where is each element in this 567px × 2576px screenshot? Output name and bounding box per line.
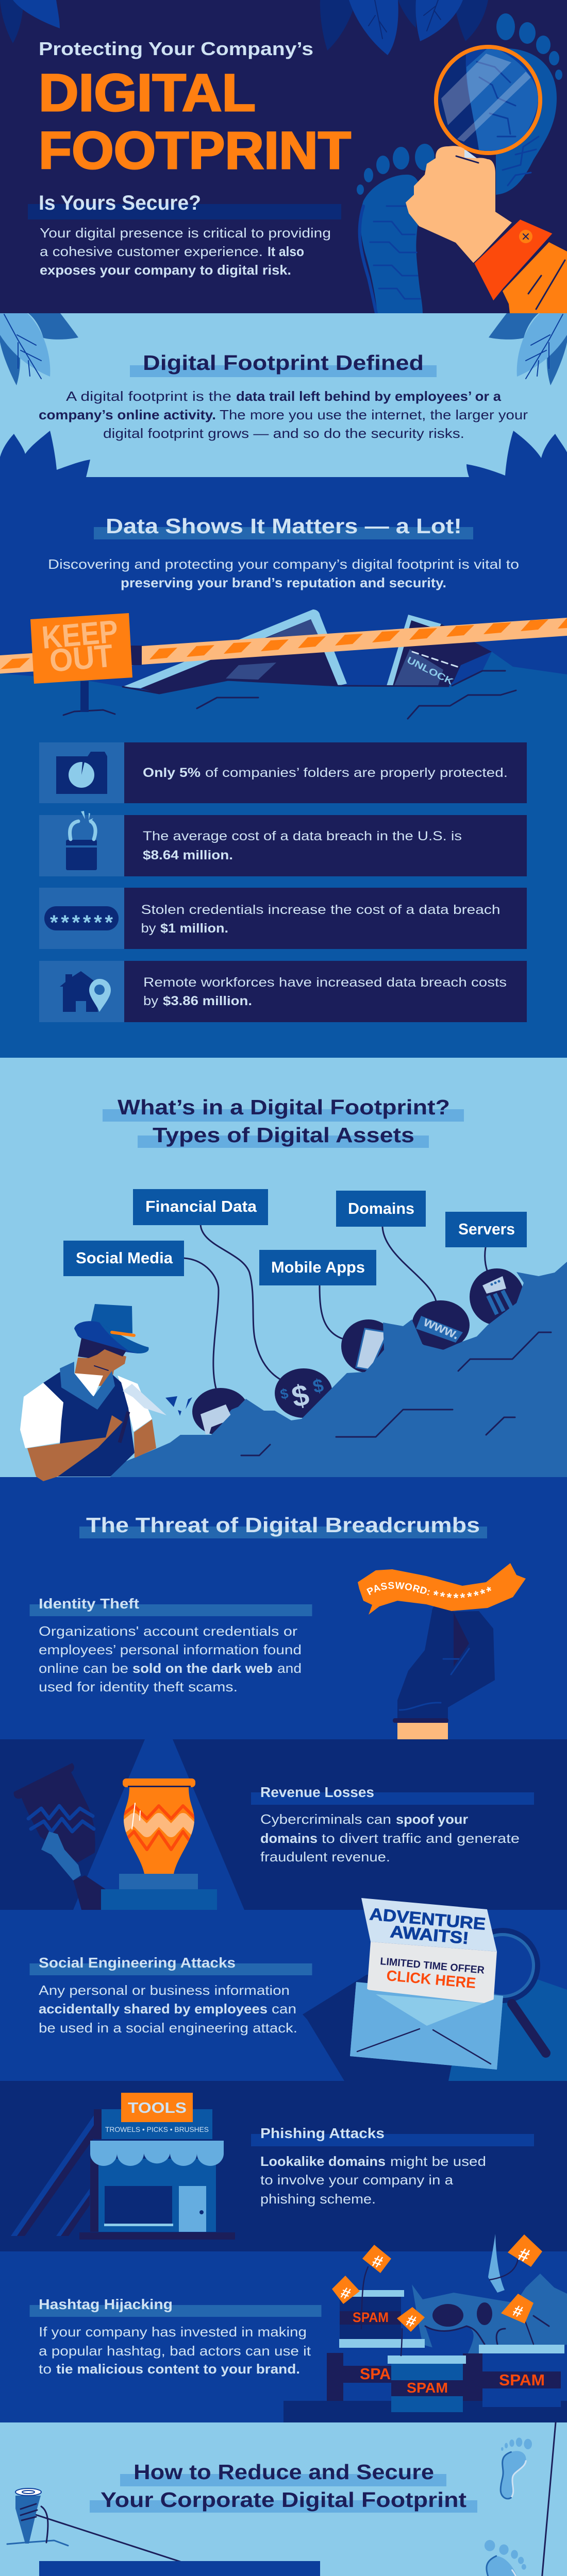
illustration: stolen dark vase and hand — [14, 1763, 106, 1910]
stat text — [141, 903, 501, 936]
stat text: $3.86 million. — [163, 994, 252, 1008]
illustration: keep out tape — [0, 617, 567, 674]
icon: tool shop: TOOLS — [128, 2100, 187, 2116]
icon: password ribbon: PASSWORD: — [366, 1582, 430, 1595]
icon: tool shop: TROWELS • PICKS • BRUSHES — [105, 2125, 209, 2133]
icon: password ribbon — [358, 1563, 526, 1615]
heading: Protecting Your Company's: Protecting Your Company’s — [39, 38, 313, 59]
panel: hero — [0, 0, 567, 313]
text block: phishing: Lookalike domains — [260, 2154, 386, 2169]
label: Mobile Apps: Mobile Apps — [271, 1258, 365, 1276]
text block: data intro: preserving your brand’s reputation and security. — [121, 575, 446, 590]
icon: folder with pie — [56, 752, 107, 794]
arms — [27, 1415, 156, 1481]
illustration: mountain — [110, 1262, 567, 1477]
text block: data intro: Discovering and protecting your company’s digital footprint is vital to — [48, 556, 519, 572]
panel: revenue losses — [0, 1739, 567, 1910]
label: Servers — [445, 1212, 527, 1247]
subheading: Revenue Losses: Revenue Losses — [260, 1784, 374, 1800]
icon: broken lock — [66, 811, 97, 870]
text block: identity theft: employees’ personal information found — [39, 1642, 302, 1657]
icon: keep out sign: OUT — [48, 638, 114, 679]
text block: identity theft: online can be — [39, 1660, 128, 1676]
subheading: Identity Theft: Identity Theft — [39, 1596, 139, 1612]
text block: hero intro: Your digital presence is critical to providing — [40, 225, 331, 241]
icon: phishing flyer in envelope: LIMITED TIME OFFER — [380, 1956, 485, 1976]
icon: password ribbon: ********* — [433, 1587, 492, 1598]
hat — [74, 1304, 148, 1353]
panel: types of digital assets — [0, 1058, 567, 1477]
stat text: by — [141, 921, 156, 936]
text block: revenue losses: domains — [260, 1831, 318, 1846]
icon: phishing flyer in envelope: AWAITS! — [389, 1922, 470, 1947]
heading: Types of Digital Assets: Types of Digital Assets — [153, 1123, 414, 1147]
icon: hand — [406, 146, 512, 263]
subheading: Phishing Attacks: Phishing Attacks — [260, 2125, 385, 2141]
icon: www bar: www. — [421, 1314, 462, 1343]
text block: phishing: to involve your company in a — [260, 2172, 454, 2188]
subheading: Identity Theft — [30, 1596, 312, 1616]
text block: definition: data trail left behind by employees’ or a — [236, 388, 502, 404]
icon: magnifying glass behind envelope — [468, 1930, 546, 2053]
text block: social engineering: be used in a social engineering attack. — [39, 2020, 297, 2036]
decorative ropes — [16, 2422, 556, 2576]
heading: How to Reduce and Secure: How to Reduce and Secure — [134, 2460, 434, 2484]
stat card: breach cost — [39, 811, 527, 876]
text block: social engineering: accidentally shared by employees — [39, 2001, 268, 2016]
subheading: Is Yours Secure?: Is Yours Secure? — [39, 192, 201, 214]
panel: hashtag hijacking — [0, 2234, 567, 2422]
stat text — [143, 975, 507, 1008]
subheading: Is Yours Secure? — [28, 192, 341, 219]
icon: keep out sign — [30, 613, 142, 712]
icon: top-left leaves — [0, 313, 78, 385]
text block: phishing: might be used — [390, 2154, 486, 2169]
subheading: Hashtag Hijacking: Hashtag Hijacking — [39, 2296, 173, 2312]
panel: social engineering attacks — [0, 1898, 567, 2081]
panel: the threat of digital breadcrumbs — [30, 1513, 526, 1739]
text block: identity theft: sold on the dark web — [132, 1660, 273, 1676]
text block: definition: The more you use the internet, the larger your — [220, 407, 528, 422]
label: Social Media: Social Media — [76, 1249, 173, 1267]
panel: how to reduce and secure — [0, 2422, 567, 2576]
subheading: Phishing Attacks — [251, 2125, 534, 2146]
illustration: hashtag flags: # — [511, 2301, 525, 2321]
illustration: spam podiums: SPA — [360, 2365, 391, 2383]
stat text: The average cost of a data breach in the U.S. is — [143, 829, 462, 843]
icon: upper footprint with circuit traces — [466, 13, 562, 195]
text block: identity theft: used for identity theft scams. — [39, 1679, 238, 1694]
illustration: hashtag flags — [332, 2234, 542, 2355]
shirt and vest — [20, 1362, 152, 1477]
text block: social engineering: can — [272, 2001, 296, 2016]
illustration: spam podiums: SPAM — [499, 2371, 545, 2389]
panel: phishing attacks — [0, 2081, 567, 2251]
ground and stat background — [0, 652, 567, 1058]
text block: phishing: phishing scheme. — [260, 2191, 376, 2207]
icon: phishing flyer in envelope: CLICK HERE — [386, 1968, 477, 1992]
text block: social engineering: Any personal or business information — [39, 1982, 290, 1998]
text block: hero intro — [40, 225, 331, 278]
icon: top-right leaves — [489, 313, 567, 385]
text block: revenue losses: fraudulent revenue. — [260, 1849, 390, 1865]
label: Financial Data — [133, 1189, 268, 1225]
stat text — [143, 829, 462, 862]
subheading: Revenue Losses — [251, 1784, 534, 1805]
hammer — [120, 1384, 192, 1443]
icon: password pill: ****** — [50, 911, 113, 934]
text block: social engineering — [39, 1982, 297, 2036]
text block: definition: company’s online activity. — [39, 407, 216, 422]
stat text: $1 million. — [160, 921, 228, 936]
stat card: stolen credentials — [39, 888, 527, 949]
text block: revenue losses: spoof your — [396, 1811, 468, 1827]
text block: identity theft: and — [277, 1660, 302, 1676]
illustration: ladders — [11, 2115, 94, 2236]
stat card: remote workforces — [39, 961, 527, 1022]
text block: definition: digital footprint grows — and so do the security risks. — [103, 426, 464, 441]
icon: top-left leaves — [0, 0, 60, 43]
icon: dollar signs: $ — [311, 1375, 325, 1397]
text block: hashtag: to — [39, 2361, 52, 2377]
text block: hashtag: If your company has invested in making — [39, 2324, 307, 2340]
icon: tool shop — [79, 2093, 235, 2240]
card: prioritize employee security training — [39, 2561, 320, 2576]
text block: hashtag: tie malicious content to your brand. — [56, 2361, 300, 2377]
icon: bottom foliage silhouette — [0, 431, 567, 479]
stat text: of companies’ folders are properly protected. — [205, 766, 508, 780]
label: Financial Data: Financial Data — [145, 1197, 257, 1215]
illustration: sunken laptop — [123, 609, 347, 693]
stat text: $8.64 million. — [143, 848, 233, 862]
illustration: ground cracks — [63, 671, 516, 719]
text block: revenue losses: to divert traffic and generate — [322, 1831, 520, 1846]
icon: server — [482, 1276, 511, 1314]
illustration: hashtag flags: # — [370, 2251, 386, 2272]
heading: Your Corporate Digital Footprint: Your Corporate Digital Footprint — [101, 2488, 466, 2512]
illustration: orange vase on pedestal — [101, 1778, 217, 1910]
icon: gloved hand — [393, 1603, 495, 1739]
illustration: spam podiums: SPAM — [407, 2380, 448, 2396]
illustration: spam dinosaur skull — [412, 2234, 567, 2357]
panel: data shows it matters — [0, 478, 567, 1058]
text block: definition — [39, 388, 528, 441]
text block: revenue losses — [260, 1811, 520, 1865]
icon: phishing flyer in envelope — [350, 1898, 503, 2070]
title: DIGITAL: DIGITAL — [39, 63, 256, 122]
subheading: Social Engineering Attacks: Social Engineering Attacks — [39, 1955, 236, 1971]
icon: top-center leaves — [320, 0, 488, 55]
text block: hero intro: It also — [268, 244, 304, 259]
heading: What's in a Digital Footprint?: What’s in a Digital Footprint? — [118, 1095, 450, 1119]
illustration: sunken phone with UNLOCK label: UNLOCK — [405, 655, 455, 687]
icon: dollar signs: $ — [289, 1378, 312, 1414]
text block: hashtag: a popular hashtag, bad actors can use it — [39, 2343, 311, 2359]
label: Domains — [336, 1191, 426, 1227]
icon: magnifying glass — [436, 46, 544, 164]
stat text: by — [143, 994, 159, 1008]
icon: dollar signs — [279, 1375, 325, 1414]
illustration: spam podiums — [284, 2290, 567, 2422]
text block: revenue losses: Cybercriminals can — [260, 1811, 391, 1827]
text block: hero intro: exposes your company to digital risk. — [40, 262, 291, 278]
icon: house with pin — [60, 971, 111, 1012]
icon: speech bubbles — [201, 1404, 246, 1434]
stat card: folders — [39, 742, 527, 803]
icon: keep out sign: KEEP — [40, 614, 120, 656]
illustration: hashtag flags: # — [339, 2283, 353, 2303]
illustration: mountain cracks — [241, 1332, 551, 1455]
icon: left stake — [7, 2488, 68, 2546]
label: Domains: Domains — [348, 1199, 414, 1217]
text block: data intro — [48, 556, 519, 590]
illustration: hashtag flags: # — [404, 2311, 419, 2331]
text block: phishing — [260, 2154, 486, 2207]
text block: identity theft: Organizations' account credentials or — [39, 1623, 297, 1639]
heading: The Threat of Digital Breadcrumbs: The Threat of Digital Breadcrumbs — [86, 1513, 480, 1537]
icon: footprints trail — [320, 2437, 532, 2576]
stat text: Remote workforces have increased data breach costs — [143, 975, 507, 990]
subheading: Hashtag Hijacking — [30, 2296, 322, 2317]
icon: shirt cuff and sleeve — [474, 219, 567, 313]
illustration: spam podiums: SPAM — [353, 2310, 389, 2325]
illustration: hashtag flags: # — [515, 2243, 532, 2266]
illustration: background shapes — [303, 1964, 567, 2081]
label: Servers: Servers — [458, 1220, 515, 1238]
illustration: sunken phone with UNLOCK label — [387, 615, 492, 687]
heading: Data Shows It Matters: Data Shows It Matters — a Lot! — [106, 514, 462, 538]
illustration: spotlight — [73, 1739, 244, 1910]
text block: hashtag — [39, 2324, 311, 2377]
icon: lower footprint with circuit traces — [357, 144, 435, 313]
panel: digital footprint defined — [0, 313, 567, 479]
stat text: Stolen credentials increase the cost of a data breach — [141, 903, 501, 917]
icon: phone — [356, 1329, 388, 1370]
label: Social Media — [63, 1241, 184, 1276]
illustration: rocks — [192, 1268, 524, 1435]
head — [72, 1338, 126, 1386]
icon: phishing flyer in envelope: ADVENTURE — [369, 1904, 487, 1934]
text block: identity theft — [39, 1623, 302, 1694]
stat text: Only 5% — [143, 766, 201, 780]
illustration: man with hammer — [20, 1304, 192, 1481]
text block: hero intro: a cohesive customer experience. — [40, 244, 263, 259]
subheading: Social Engineering Attacks — [30, 1955, 312, 1975]
title: FOOTPRINT: FOOTPRINT — [39, 121, 351, 180]
icon: dollar signs: $ — [279, 1385, 290, 1402]
stat text — [143, 766, 508, 780]
label: Mobile Apps — [259, 1250, 376, 1285]
icon: password pill — [44, 906, 119, 934]
heading: Digital Footprint Defined: Digital Footprint Defined — [143, 351, 424, 375]
text block: definition: A digital footprint is the — [66, 388, 231, 404]
connector wires — [184, 1225, 488, 1388]
